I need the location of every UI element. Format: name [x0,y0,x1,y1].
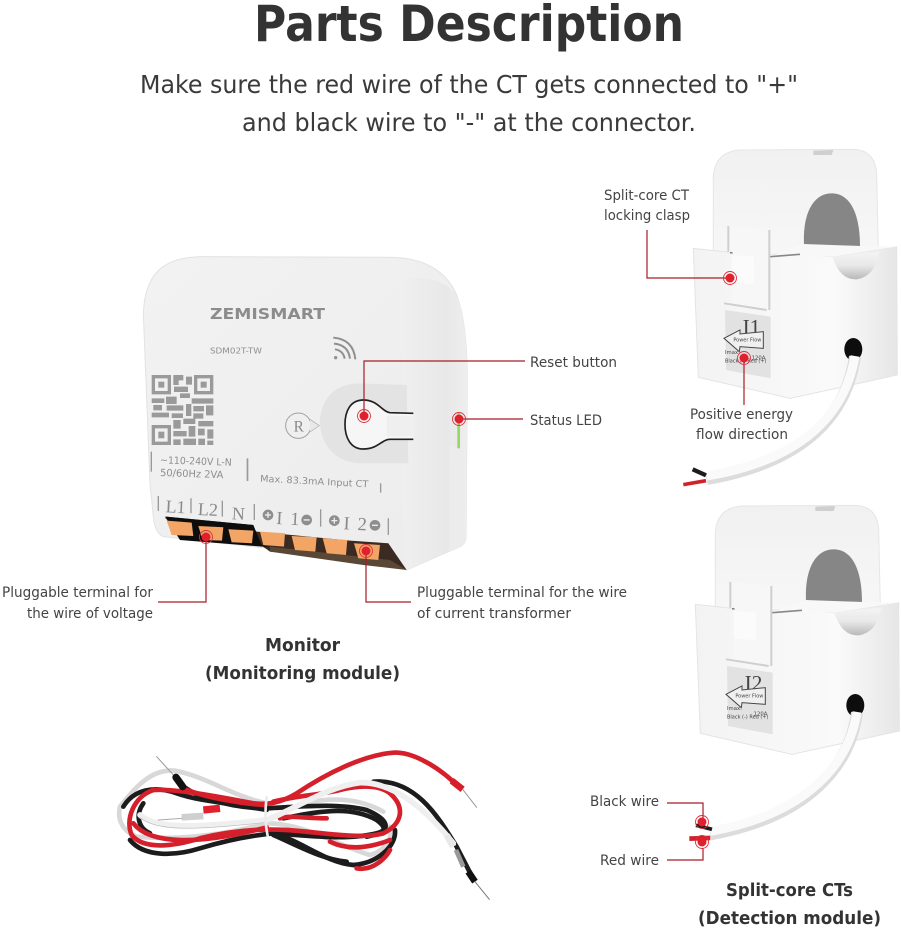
label: locking clasp: Split-core CT [604,188,689,204]
voltage rating: 50/60Hz 2VA [160,468,224,481]
terminal labels [158,496,388,536]
back white wires [119,770,391,855]
label: CT terminal: Pluggable terminal for the wire [417,585,627,601]
leader: locking clasp [647,230,736,284]
input current rating: Max. 83.3mA Input CT [260,474,369,490]
orange terminals [167,521,380,560]
monitoring module photo [143,257,467,570]
front white wire [140,783,453,843]
wire bundle [119,753,489,899]
label: voltage terminal: the wire of voltage [27,606,153,622]
ferrule: black end [468,872,475,882]
leader: CT terminal [360,544,411,602]
current transformer I2 [689,505,899,839]
model number: SDM02T-TW [210,346,262,355]
CT label sticker: Power Flow [733,338,761,344]
R reset marker: R [294,419,305,436]
red wires [129,753,453,869]
leader: black wire [667,803,708,828]
cable [844,338,862,361]
CT label sticker: Black (-) Red (+) [725,359,767,365]
caption: split-core CTs: Split-core CTs [726,880,853,901]
cable wire ends [696,825,712,829]
label: energy flow: flow direction [696,427,788,443]
subtitle [140,70,798,137]
subtitle: Make sure the red wire of the CT gets connected to "+" [140,70,798,99]
ferrule: white front [182,816,203,817]
leader: red wire [667,836,708,860]
lower housing [693,247,897,398]
ferrule: black top [157,757,175,777]
core opening [806,549,862,602]
cable [846,694,864,717]
CT label sticker: 120A [754,711,768,717]
subtitle: and black wire to "-" at the connector. [242,108,696,137]
upper clamp [713,149,878,257]
leader: reset button [358,361,525,422]
module body [143,257,467,570]
CT label sticker: I2 [745,671,762,695]
ferrule: red front [203,808,220,810]
CT label sticker [724,310,771,378]
caption: monitor [205,635,400,684]
reset button recess [320,383,408,463]
label: CT terminal: of current transformer [417,606,571,622]
label: voltage terminal: Pluggable terminal for [2,585,153,601]
label: red wire: Red wire [600,853,659,869]
caption: split-core CTs: (Detection module) [698,908,881,929]
terminal labels: L1 [165,496,186,517]
module side face [397,278,467,570]
caption: monitor: Monitor [265,635,340,656]
label: reset button: Reset button [530,355,617,371]
status LED strip [457,413,460,448]
locking clasp [731,582,770,666]
label: black wire: Black wire [590,794,659,810]
CT label sticker: Black (-) Red (+) [727,715,769,721]
label: status LED: Status LED [530,413,602,429]
lower housing [695,603,899,754]
label: energy flow: Positive energy [690,407,793,423]
voltage rating [151,452,248,481]
brand name: ZEMISMART [210,305,326,323]
locking clasp [729,226,768,310]
QR code [152,375,213,445]
terminal labels: I2 [343,513,367,536]
terminal cavity [165,517,407,570]
caption: monitor: (Monitoring module) [205,663,400,684]
cable tie [266,797,268,836]
cable wire ends [693,469,706,475]
ferrule: red end [452,781,463,789]
CT label sticker: 120A [752,355,766,361]
reset button [345,400,413,449]
terminal labels: L2 [197,499,218,520]
black wires [123,781,473,880]
label: voltage terminal [2,585,153,622]
ferrule: white band [447,835,453,847]
leader: energy flow [738,352,750,405]
terminal labels: N [231,503,245,524]
leader: status LED [452,412,523,426]
core opening [804,193,860,246]
terminal labels: I1 [276,508,300,530]
CT label sticker: Imax: [727,706,742,712]
label: locking clasp: locking clasp [604,208,690,224]
wifi icon [333,338,355,359]
current transformer I1 [683,149,897,485]
upper clamp [715,505,880,613]
CT label sticker: I1 [743,315,760,339]
CT label sticker: Imax: [725,350,740,356]
caption: split-core CTs [698,880,881,929]
label: locking clasp [604,188,690,224]
leader: voltage terminal [158,530,212,602]
label: CT terminal [417,585,627,622]
label: energy flow [690,407,793,443]
CT label sticker [726,666,773,734]
voltage rating: ~110-240V L-N [160,455,232,469]
R reset marker [286,413,319,438]
CT label sticker: Power Flow [735,694,763,700]
